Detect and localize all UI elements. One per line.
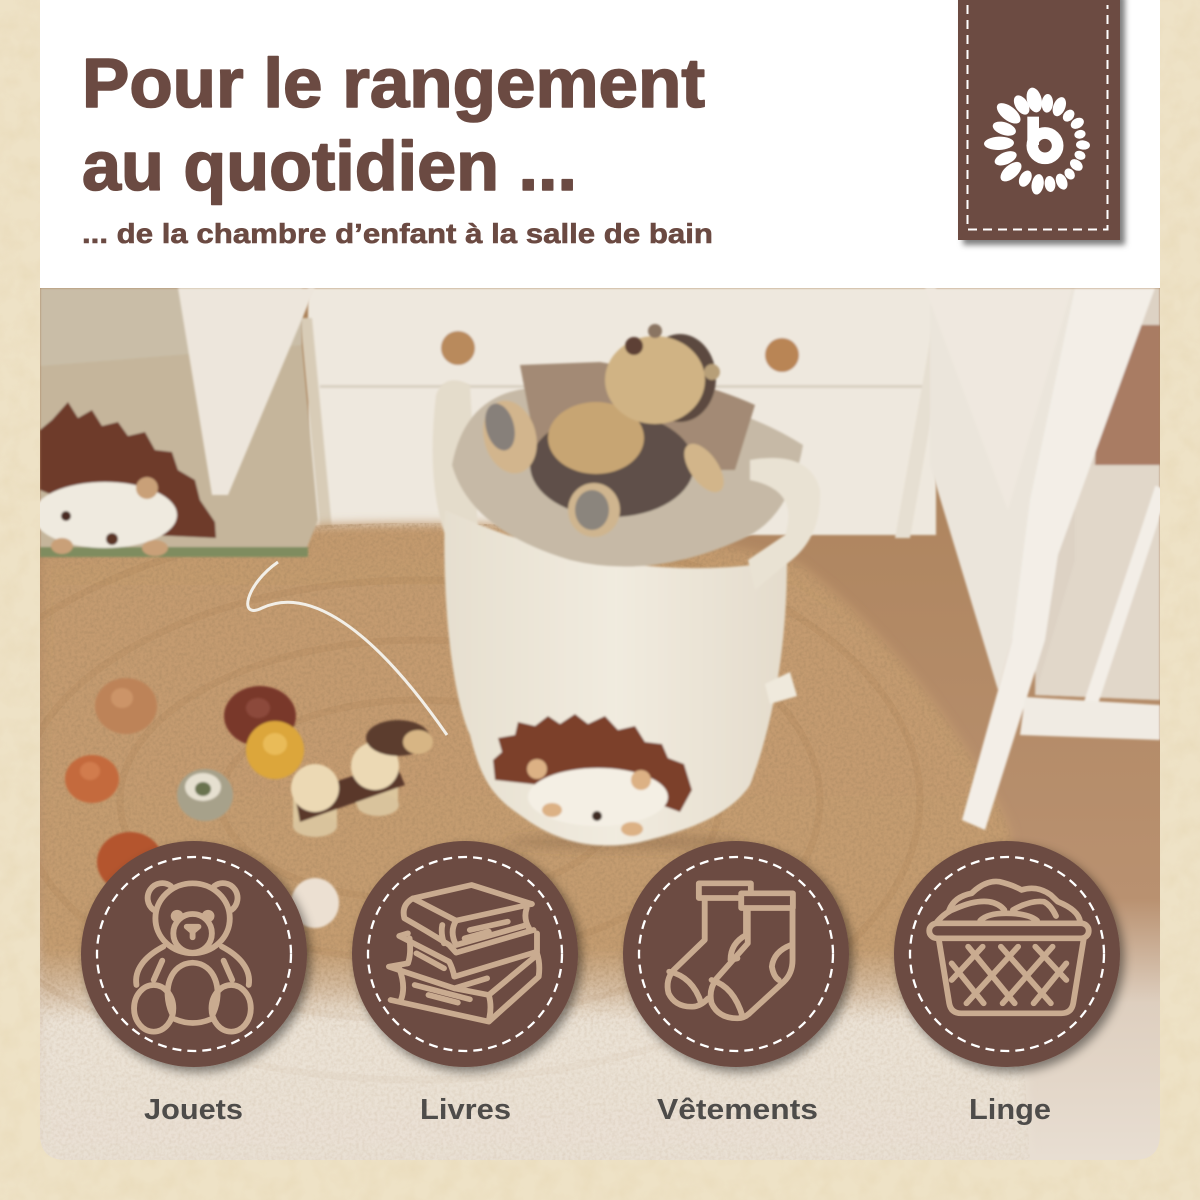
storage box with hedgehog xyxy=(33,288,318,557)
category labels: Livres xyxy=(420,1094,511,1126)
photo: nursery scene xyxy=(0,288,1162,1160)
brand tag with logo xyxy=(958,0,1120,240)
category labels: Jouets xyxy=(144,1094,243,1126)
logo: sun with b xyxy=(984,86,1090,196)
title xyxy=(82,44,705,205)
icon: laundry basket xyxy=(929,881,1089,1013)
category labels: Linge xyxy=(969,1094,1051,1126)
badge: Jouets xyxy=(81,841,307,1067)
title: au quotidien ... xyxy=(82,127,577,205)
badge: Linge xyxy=(894,841,1120,1067)
crib xyxy=(925,288,1162,830)
header panel xyxy=(40,0,1160,288)
icon: stack of books xyxy=(389,885,539,1022)
pull cord xyxy=(248,562,447,735)
badge: Vêtements xyxy=(623,841,849,1067)
basket hedgehog appliqué xyxy=(493,714,692,812)
icon: teddy bear xyxy=(134,883,251,1032)
wooden toys xyxy=(65,678,433,928)
white furniture edge, left xyxy=(178,288,315,495)
badge: Livres xyxy=(352,841,578,1067)
subtitle: ... de la chambre d’enfant à la salle de bain xyxy=(82,218,713,249)
dresser xyxy=(300,288,945,538)
laundry basket with plush xyxy=(433,324,820,850)
category labels: Vêtements xyxy=(657,1094,818,1126)
title: Pour le rangement xyxy=(82,44,705,122)
icon: socks xyxy=(668,883,793,1018)
woven rug xyxy=(0,520,1040,1160)
category labels xyxy=(144,1094,1051,1126)
